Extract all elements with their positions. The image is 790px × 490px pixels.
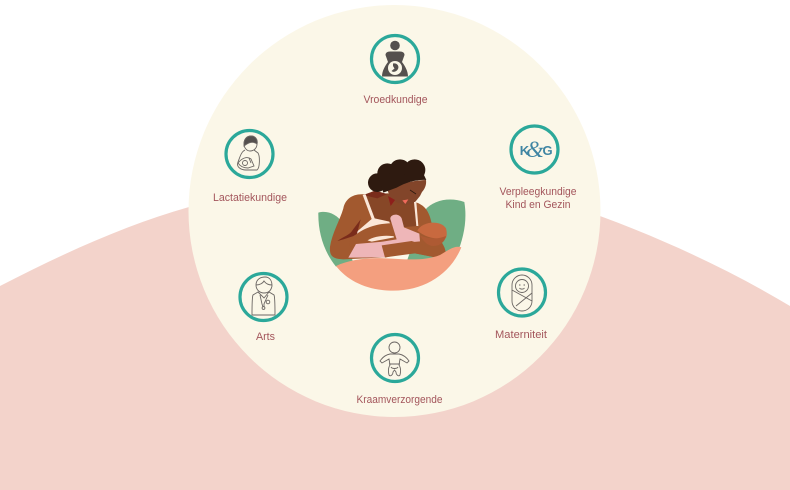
label: Kraamverzorgende: Kraamverzorgende: [356, 394, 442, 406]
label: Verpleegkundige Kind en Gezin: [500, 186, 576, 211]
icon: Kind en Gezin logo: G: [542, 143, 553, 158]
illustration: breastfeeding mother: [318, 159, 465, 291]
right green leaf: [407, 199, 465, 262]
label: Vroedkundige: Vroedkundige: [364, 94, 428, 106]
label: Arts: Arts: [256, 331, 275, 343]
label: Verpleegkundige Kind en Gezin: Kind en Gezin: [506, 199, 570, 211]
label: Lactatiekundige: Lactatiekundige: [213, 192, 287, 204]
baby body: [348, 215, 420, 258]
icon: Kind en Gezin logo: K: [520, 143, 530, 158]
blanket: [336, 247, 461, 291]
neck red shadow: [388, 196, 395, 206]
icon: Kraamverzorgende baby: [372, 334, 418, 382]
mother lower arm: [382, 241, 445, 259]
face and neck: [387, 180, 426, 205]
label: Materniteit: Materniteit: [495, 329, 547, 341]
white top: [352, 194, 394, 242]
icon: Materniteit swaddled baby: [498, 269, 546, 316]
icon: Lactatiekundige: [226, 130, 273, 178]
right strap: [414, 202, 418, 226]
mother chest: [366, 193, 417, 227]
label: Verpleegkundige Kind en Gezin: Verpleegkundige: [500, 186, 576, 198]
baby head shade: [420, 235, 446, 246]
lips: [402, 199, 408, 204]
eye: [410, 190, 416, 194]
icon: Vroedkundige: [372, 36, 418, 82]
left green leaf: [318, 212, 353, 267]
cream central circle: [188, 5, 600, 417]
mother forearm: [350, 223, 400, 247]
pink background hill: [0, 191, 790, 490]
mother body: [330, 193, 446, 259]
neck shadow: [363, 191, 387, 198]
underarm shadow: [337, 219, 361, 241]
icon: Kind en Gezin logo: [511, 126, 558, 173]
hair: [368, 159, 426, 193]
icon: Kind en Gezin logo: &: [526, 137, 544, 162]
baby head: [417, 223, 447, 239]
icon: Arts: [240, 274, 287, 320]
